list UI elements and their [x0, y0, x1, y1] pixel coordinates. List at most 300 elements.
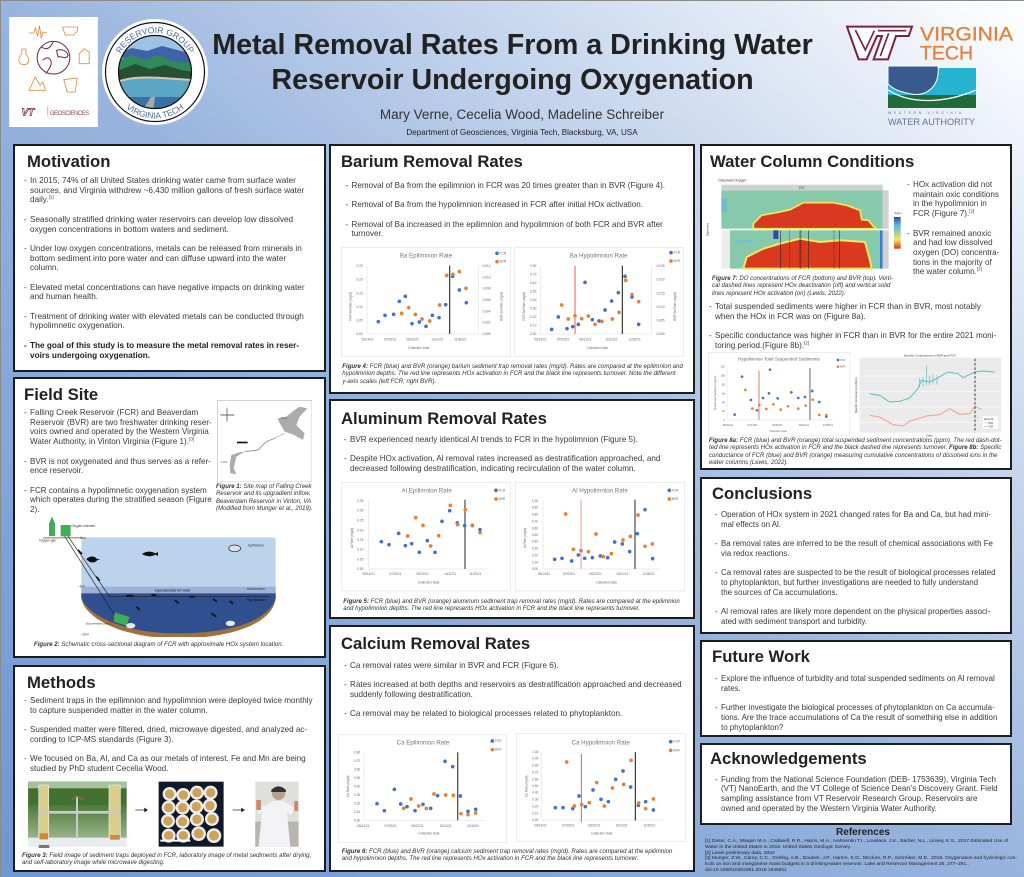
text: water column side bullets: oxygen (DO) concentra- [913, 248, 999, 257]
chart: Ba hypolimnion rate: FCR Ba Rate (mg/d) [522, 292, 526, 321]
chart: Ca hypolimnion rate: 0.00 [532, 818, 539, 822]
references [705, 827, 1017, 873]
chart: figure 8b specific conductance: BVR [989, 423, 994, 425]
caption: figure 8: Figure 8a: FCR (blue) and BVR (orange) total suspended sediment concentrations (ppm). The red dash-dot- [709, 437, 1002, 444]
chart: Ba epilimnion rate: 0.05 [356, 319, 363, 323]
heading: methods: Methods [27, 673, 96, 692]
chart: Ba hypolimnion rate [514, 247, 684, 357]
text: barium bullets: Removal of Ba from the hypolimnion increased in FCR after initial HOx activation. [352, 200, 643, 209]
text: future work bullets: to phytoplankton? [721, 722, 783, 732]
heading: barium: Barium Removal Rates [341, 152, 523, 171]
chart: Ba epilimnion rate: Collection Date [408, 346, 429, 350]
figure 2: HOx schematic: 0 m [81, 536, 86, 540]
text: motivation bullets: hypolimnetic oxygenation. [30, 321, 125, 330]
chart: Ca epilimnion rate: 0.70 [354, 759, 361, 763]
panel: field site [13, 377, 326, 658]
text: aluminum bullets: decreased following destratification, indicating recirculation of the water column. [350, 464, 636, 473]
chart: Ba hypolimnion rate: 0.00 [530, 332, 537, 336]
references list: trols on iron and manganese mass budgets in a drinking-water reservoir. Lake and Reservoir Management 35, 277–291.. [705, 862, 969, 867]
panel: aluminum removal rates [329, 399, 695, 619]
text: water column side bullets: the water column.[2] [913, 267, 982, 276]
references heading: References [836, 827, 890, 838]
text: aluminum bullets: Despite HOx activation, Al removal rates increased as destratification approached, and [350, 454, 660, 463]
figure 2: HOx schematic: Hypolimnion [247, 598, 266, 602]
text: field site bullets [24, 408, 212, 514]
chart: Ca epilimnion rate: 0.60 [354, 768, 361, 772]
text: future work bullets [715, 674, 997, 732]
text: conclusions bullets: - [715, 539, 718, 548]
text: field site bullets: FCR contains a hypolimnetic oxygenation system [30, 486, 207, 495]
text: motivation bullets: column. [30, 263, 59, 272]
text: aluminum bullets: - [344, 435, 347, 444]
chart: Ba epilimnion rate: 11/30/21 [454, 338, 466, 342]
chart: Ba hypolimnion rate: FCR [674, 251, 681, 255]
chart: Ba epilimnion rate: Ba Epilimnion Rate [400, 253, 452, 260]
logo: reservoir group: VIRGINIA TECH [128, 104, 184, 119]
chart: Al epilimnion rate: 0.15 [357, 538, 363, 542]
chart: Al hypolimnion rate: 07/03/21 [563, 572, 576, 576]
chart: Ba hypolimnion rate: 07/03/21 [557, 338, 570, 342]
chart: Ba epilimnion rate: 0.012 [482, 264, 490, 268]
text: conclusions bullets: ated with sediment transport and turbidity. [721, 617, 867, 626]
chart: Ca hypolimnion rate: 0.70 [532, 771, 539, 775]
text: methods bullets: studied by PhD student Cecelia Wood. [30, 764, 168, 773]
chart: Al epilimnion rate: 07/03/21 [389, 572, 401, 576]
text: conclusions bullets [715, 510, 996, 626]
text: barium bullets: - [346, 181, 348, 190]
chart: Ba epilimnion rate: 0.006 [482, 298, 490, 302]
figure 7: dissolved oxygen heatmap: Depth (m) [706, 223, 710, 236]
chart: Ba epilimnion rate: FCR Ba Rate (mg/d) [348, 292, 352, 321]
caption: figure 2: Figure 2: Schematic cross-sectional diagram of FCR with approximate HOx system location. [34, 641, 283, 648]
logo: reservoir group [102, 19, 208, 125]
text: future work bullets: - [715, 674, 718, 683]
text: motivation bullets: - [24, 215, 27, 224]
chart: Ca hypolimnion rate: 0.90 [532, 757, 539, 761]
chart: Ba hypolimnion rate: 0.020 [657, 278, 665, 282]
logo: western virginia water authority: WESTERN VIRGINIA [888, 111, 964, 115]
chart: figure 8a total suspended sediments: 120 [721, 365, 726, 369]
heading: field site: Field Site [24, 385, 98, 404]
heading: calcium: Calcium Removal Rates [341, 634, 530, 653]
text: conclusions bullets: to phytoplankton, but further investigations are needed to fully understand [721, 578, 978, 587]
chart: Ca hypolimnion rate: 10/11/21 [616, 824, 628, 828]
chart: figure 8a total suspended sediments: 05/24/21 [723, 423, 734, 427]
chart: Al epilimnion rate: 0.30 [357, 509, 363, 513]
chart: Ba hypolimnion rate: BVR [674, 259, 681, 263]
caption: figure 7: cal dashed lines represent HOx deactivation (off) and vertical solid [712, 282, 890, 289]
chart: Ca hypolimnion rate: 0.40 [532, 791, 539, 795]
text: barium bullets: Removal of Ba from the epilimnion in FCR was 20 times greater than in BVR (Figure 4). [352, 181, 665, 190]
text: conclusions bullets: via redox reactions. [721, 549, 789, 558]
text: motivation bullets: voirs undergoing oxygenation. [30, 351, 150, 360]
chart: Ba epilimnion rate: FCR [499, 252, 507, 256]
figure 1: site map: FCR [221, 460, 228, 464]
text: acknowledgements bullet: sampling assistance from VT Reservoir Research Group. Reservoirs are [721, 794, 977, 803]
text: motivation bullets: Treatment of drinking water with elevated metals can be conducted through [30, 312, 304, 321]
text: methods bullets: - [24, 725, 27, 734]
text: field site bullets: - [24, 456, 27, 466]
caption: figure 5: Figure 5: FCR (blue) and BVR (orange) aluminum sediment trap removal rates (mg/d). Rates are compared at the epilimnion [343, 598, 680, 605]
chart: Ba hypolimnion rate: 0.60 [530, 281, 537, 285]
text: calcium bullets: - [344, 661, 347, 670]
text: water column lower bullets: - [709, 331, 712, 340]
title [212, 29, 813, 96]
text: water column lower bullets [709, 302, 996, 350]
figure 2: HOx schematic: Epilimnion [249, 543, 264, 547]
logo: reservoir group: RESERVOIR GROUP [116, 27, 194, 54]
chart: figure 8a total suspended sediments: BVR [840, 365, 846, 369]
chart: Ca hypolimnion rate: 0.60 [532, 778, 539, 782]
figure 3: photo sequence [28, 782, 299, 848]
chart: Ca epilimnion rate: 0.80 [354, 751, 361, 755]
chart: figure 8b specific conductance [854, 353, 1002, 437]
text: conclusions bullets: - [715, 568, 718, 577]
chart: Al epilimnion rate [341, 482, 511, 592]
text: motivation bullets: bottom sediment into pore water and can diffuse upward into the water [30, 254, 286, 263]
text: water column side bullets: BVR remained anoxic [913, 228, 991, 238]
chart: Ca epilimnion rate: 0.10 [354, 810, 361, 814]
text: conclusions bullets: Ba removal rates are inferred to be the result of chemical associations with Fe [721, 539, 993, 548]
text: conclusions bullets: Ca removal rates are suspected to be the result of biological processes related [721, 568, 996, 577]
text: water column side bullets: FCR (Figure 7).[2] [913, 208, 974, 218]
figure 2: HOx schematic: ~10 m [81, 633, 90, 637]
chart: Al hypolimnion rate: 0.20 [532, 554, 539, 558]
text: acknowledgements bullet: (VT) NanoEarth, and the VT College of Science Dean's Discovery Grant. Field [721, 784, 998, 793]
text: aluminum bullets: - [344, 454, 347, 463]
figure 7: dissolved oxygen heatmap: 2021 [799, 185, 805, 189]
chart: Al hypolimnion rate: 0.80 [532, 513, 539, 517]
chart: Ba epilimnion rate: BVR [499, 260, 507, 264]
chart: Ba hypolimnion rate: 0.015 [657, 292, 665, 296]
chart: Ba epilimnion rate: 0.004 [482, 310, 490, 314]
text: methods bullets: to capture suspended matter in the water column. [30, 706, 208, 715]
heading: acknowledgements: Acknowledgements [710, 749, 867, 768]
text: field site bullets: 2). [30, 505, 39, 514]
chart: Ba epilimnion rate: 0.002 [482, 321, 490, 325]
figure 7: dissolved oxygen heatmap [706, 178, 902, 270]
text: barium bullets: turnover. [352, 229, 383, 238]
chart: Ca hypolimnion rate: Collection Date [591, 832, 613, 836]
text: conclusions bullets: mal effects on Al. [721, 520, 781, 529]
caption: figure 1: Reservoir and its upgradient inflow, [216, 490, 311, 497]
chart: Ca epilimnion rate: Ca Epilimnion Rate [397, 740, 450, 747]
chart: Ba hypolimnion rate: 05/14/21 [534, 338, 547, 342]
chart: Ca epilimnion rate: 0.40 [354, 785, 361, 789]
chart: figure 8a total suspended sediments: 80 [722, 383, 726, 387]
text: motivation bullets: The goal of this study is to measure the metal removal rates in reser- [30, 341, 299, 350]
text: motivation bullets: In 2015, 74% of all United States drinking water came from surface water [30, 176, 296, 185]
caption: figure 4: hypolimnion depths. The red line represents HOx activation in FCR and the black line represents turnover. Note the different [342, 370, 676, 377]
chart: Al hypolimnion rate: 11/30/21 [643, 572, 655, 576]
chart: Ba hypolimnion rate: 0.10 [530, 324, 537, 328]
references list: [3] Munger, Z.W., Carey, C.C., Gerling, A.B., Doubek, J.P., Hamre, K.D., Mcclure, R.P., Schreiber, M.E., 2019. Oxygenation and hydrologic con- [705, 856, 1017, 861]
panel: future work [700, 640, 1012, 737]
figure 7: dissolved oxygen heatmap: (mg/L) [894, 211, 902, 215]
figure 2: HOx schematic: Submersible pump [86, 621, 111, 625]
text: motivation bullets: sources, and Virginia withdrew ~6,430 million gallons of fresh surface water [30, 186, 304, 195]
chart: Al hypolimnion rate: BVR [672, 497, 679, 501]
chart: figure 8a total suspended sediments: 40 [722, 401, 726, 405]
chart: Ba hypolimnion rate: 0.010 [657, 305, 665, 309]
chart: figure 8a total suspended sediments: Suspended Sediments (ppm) [713, 376, 717, 410]
caption: figure 8 [709, 437, 1002, 466]
title: Reservoir Undergoing Oxygenation [271, 64, 754, 96]
chart: Ba epilimnion rate: 0.20 [356, 278, 363, 282]
text: water column lower bullets: toring period.(Figure 8b).[2] [715, 340, 809, 350]
chart: Ba epilimnion rate: 08/22/21 [406, 338, 419, 342]
chart: Ca hypolimnion rate: 0.50 [532, 784, 539, 788]
caption: figure 3 [22, 852, 311, 866]
text: methods bullets: We focused on Ba, Al, and Ca as our metals of interest. Fe and Mn are being [30, 754, 306, 763]
chart: Ca hypolimnion rate: Ca Hypolimnion Rate [572, 740, 630, 747]
text: motivation bullets: - [24, 176, 27, 185]
chart: Ca hypolimnion rate: 11/30/21 [643, 824, 656, 828]
logo: virginia tech: VIRGINIA [920, 24, 1013, 46]
caption: figure 8: conductance of FCR (blue) and BVR (orange) measuring cumulative concentrations of dissolved ions in the [709, 452, 998, 459]
chart: figure 8a total suspended sediments: 09/01/21 [772, 423, 783, 427]
text: field site bullets: which operates during the stratified season (Figure [30, 495, 212, 504]
chart: Ca hypolimnion rate: 0.30 [532, 798, 539, 802]
figure 7: dissolved oxygen heatmap: Dissolved Oxygen [718, 178, 747, 182]
text: motivation bullets: oxygen concentrations in bottom waters and sediment. [30, 224, 229, 234]
text: acknowledgements bullet: owned and operated by the Western Virginia Water Authority. [721, 804, 937, 813]
text: field site bullets: - [24, 408, 27, 417]
panel: methods [13, 665, 326, 872]
panel: calcium removal rates [329, 625, 695, 872]
chart: Ca epilimnion rate: 0.50 [354, 776, 361, 780]
text: motivation bullets: - [24, 283, 27, 292]
panel: conclusions [700, 477, 1012, 634]
text: water column lower bullets: Total suspended sediments were higher in FCR than in BVR, most notably [715, 302, 981, 311]
caption: figure 3: and self-laboratory image while microwave digesting. [22, 859, 165, 866]
chart: Al epilimnion rate: 08/22/21 [416, 572, 429, 576]
caption: figure 8: ted line represents HOx activation in FCR and the black dashed line represents turnover. Figure 8b: Specific [709, 444, 1001, 451]
chart: Ca epilimnion rate: 0.20 [354, 802, 361, 806]
logo: college of geosciences: VT [22, 108, 35, 119]
references list: [1] Dieter, C.A., Maupin M.A., Caldwell, R.R., Harris, M.A., Ivahnenko T.I., Lovelace, J.K., Barber, N.L., Linsey, K.S., 2017.Estimated Use of [705, 839, 1008, 844]
chart: Ba epilimnion rate: 10/11/21 [431, 338, 443, 342]
text: water column side bullets: - [907, 228, 910, 238]
text: conclusions bullets: the sources of Ca accumulations. [721, 588, 838, 597]
text: calcium bullets: Ca removal rates were similar in BVR and FCR (Figure 6). [350, 661, 559, 670]
chart: figure 8b specific conductance: Specific Conductance (uS/cm) [854, 377, 858, 413]
text: future work bullets: rates. [721, 684, 741, 693]
caption: figure 1: Beaverdam Reservoir in Vinton, VA [216, 498, 311, 505]
chart: Al hypolimnion rate [515, 482, 685, 592]
chart: Ba hypolimnion rate: 0.80 [530, 264, 537, 268]
chart: Al hypolimnion rate: Al Hypolimnion Rate [572, 488, 629, 495]
chart: Al epilimnion rate: Al Rate (mg/d) [350, 528, 354, 548]
chart: Al epilimnion rate: 0.25 [357, 519, 363, 523]
chart: Ca epilimnion rate [338, 734, 507, 843]
chart: Ba epilimnion rate: 0.25 [356, 264, 363, 268]
text: field site bullets: Falling Creek Reservoir (FCR) and Beaverdam [30, 408, 198, 417]
text: motivation bullets: daily.[1] [30, 195, 54, 204]
chart: figure 8b specific conductance: Specific Conductance in BVR and FCR [904, 353, 957, 357]
chart: Ba hypolimnion rate: 0.025 [657, 264, 665, 268]
chart: Ba epilimnion rate: 0.010 [482, 276, 490, 280]
chart: Ca hypolimnion rate: 1.00 [532, 750, 539, 754]
logo: college of geosciences [9, 17, 98, 127]
text: future work bullets: - [715, 703, 718, 712]
text: conclusions bullets: - [715, 607, 718, 616]
chart: Ba hypolimnion rate: 11/30/21 [629, 338, 641, 342]
caption: figure 7: Figure 7: DO concentrations of FCR (bottom) and BVR (top). Verti- [712, 275, 893, 282]
text: future work bullets: Further investigate the biological processes of phytoplankton on Ca accumula- [721, 703, 995, 712]
text: methods bullets: - [24, 754, 27, 763]
text: acknowledgements bullet: Funding from the National Science Foundation (DEB- 1753639), Virginia Tech [721, 774, 996, 784]
references list [705, 838, 1017, 873]
references list: [2] Lewis preliminary data, 2022 [705, 851, 775, 856]
chart: Ca hypolimnion rate: 0.20 [532, 805, 539, 809]
affiliation: Department of Geosciences, Virginia Tech, Blacksburg, VA, USA [406, 128, 638, 137]
caption: figure 1: (Modified from Munger et al., 2019). [216, 505, 313, 512]
figure 2: HOx schematic: Oxygen gas [39, 539, 57, 543]
text: methods bullets: Suspended matter were filtered, dried, microwave digested, and analyzed ac- [30, 725, 307, 734]
chart: Al hypolimnion rate: Collection Date [596, 581, 618, 585]
text: conclusions bullets: - [715, 510, 718, 519]
text: water column side bullets: maintain oxic conditions [913, 190, 999, 199]
chart: Ca epilimnion rate: Collection Date [419, 832, 440, 836]
text: motivation bullets: - [24, 312, 27, 321]
chart: Al epilimnion rate: 05/14/21 [362, 572, 375, 576]
chart: Al epilimnion rate: Collection Date [418, 581, 439, 585]
caption: figure 5: and hypolimnion depths. The red line represents HOx activation in FCR and the black line represents turnover. [343, 605, 640, 612]
chart: figure 8a total suspended sediments: 10/21/21 [799, 423, 810, 427]
chart: figure 8b specific conductance: Reservoir [984, 418, 994, 421]
chart: Ca hypolimnion rate: 05/14/21 [535, 824, 547, 828]
chart: Ba hypolimnion rate: 10/11/21 [606, 338, 618, 342]
text: acknowledgements bullet [715, 774, 998, 813]
text: calcium bullets: suddenly following destratification. [350, 690, 473, 699]
chart: Ca epilimnion rate: 05/14/21 [357, 824, 370, 828]
text: motivation bullets: Seasonally stratified drinking water reservoirs can develop low dissolved [30, 215, 293, 224]
chart: Al epilimnion rate: BVR [498, 497, 506, 501]
text: conclusions bullets: Operation of HOx system in 2021 changed rates for Ba and Ca, but had mini- [721, 510, 991, 519]
chart: Ba hypolimnion rate: Collection Date [587, 346, 609, 350]
chart: Al hypolimnion rate: 0.50 [532, 533, 539, 537]
caption: figure 1: Figure 1: Site map of Falling Creek [216, 483, 312, 490]
text: future work bullets: tions. Are the trace accumulations of Ca the result of something else in addition [721, 713, 997, 722]
caption: figure 5 [343, 598, 680, 612]
text: aluminum bullets [344, 435, 660, 473]
text: calcium bullets: Ca removal may be related to biological processes related to phytoplankton. [350, 709, 622, 718]
panel: motivation [13, 144, 326, 372]
references list: doi:10.1080/10402381.2018.1545811 [705, 868, 787, 873]
chart: Ba epilimnion rate: BVR Ba Rate (mg/d) [499, 292, 503, 321]
references list: Water in the United States in 2015. United States Geologic Survey. [705, 845, 851, 850]
chart: Ca epilimnion rate: 08/22/21 [411, 824, 424, 828]
figure 2: HOx schematic: ~6 m [78, 585, 86, 589]
chart: Ba hypolimnion rate: Ba Hypolimnion Rate [570, 253, 628, 260]
chart: Al hypolimnion rate: 05/14/21 [538, 572, 551, 576]
chart: Al hypolimnion rate: 0.00 [532, 567, 539, 571]
chart: Ba hypolimnion rate: 0.005 [657, 319, 665, 323]
chart: figure 8a total suspended sediments: 0 [724, 418, 726, 422]
heading: water column conditions: Water Column Conditions [710, 152, 914, 171]
chart: Al hypolimnion rate: 1.00 [532, 499, 539, 503]
text: field site bullets: ence reservoir. [30, 466, 83, 475]
chart: Ca epilimnion rate: 10/11/21 [440, 824, 452, 828]
chart: figure 8a total suspended sediments: 07/13/21 [747, 423, 758, 427]
text: field site bullets: BVR is not oxygenated and thus serves as a refer- [30, 456, 211, 466]
chart: Ba epilimnion rate [341, 247, 511, 357]
text: motivation bullets: Under low oxygen concentrations, metals can be released from minerals in [30, 244, 302, 253]
caption: figure 3: Figure 3: Field image of sediment traps deployed in FCR, laboratory image of metal sediments after drying, [22, 852, 311, 859]
chart: figure 8a total suspended sediments: Hypolimnion Total Suspended Sediments [738, 357, 821, 362]
text: barium bullets [346, 181, 665, 238]
chart: Al epilimnion rate: Al Epilimnion Rate [401, 488, 452, 495]
figure 2: HOx schematic: Metalimnion [247, 587, 265, 591]
panel: barium removal rates [329, 144, 695, 394]
text: calcium bullets: Rates increased at both depths and reservoirs as destratification approached and decreased [350, 680, 682, 689]
chart: Ba hypolimnion rate: 0.30 [530, 307, 537, 311]
chart: Al epilimnion rate: 11/30/21 [469, 572, 481, 576]
logo: college of geosciences: GEOSCIENCES [50, 111, 89, 117]
authors: Mary Verne, Cecelia Wood, Madeline Schreiber [380, 107, 664, 122]
panel: water column conditions [700, 144, 1012, 470]
chart: Al epilimnion rate: 0.35 [357, 499, 363, 503]
chart: Al hypolimnion rate: Al Rate (mg/d) [523, 528, 527, 548]
chart: Ba epilimnion rate: 0.15 [356, 292, 363, 296]
chart: Al hypolimnion rate: 08/22/21 [590, 572, 602, 576]
chart: Ba epilimnion rate: 0.000 [482, 332, 490, 336]
text: future work bullets: Explore the influence of turbidity and total suspended sediments on Al removal [721, 674, 995, 683]
figure 2: HOx schematic: Supersaturated DO water [155, 589, 191, 593]
caption: figure 4 [342, 363, 683, 385]
chart: figure 8a total suspended sediments: 60 [722, 392, 726, 396]
chart: Ca epilimnion rate: 0.00 [354, 819, 361, 823]
chart: Al hypolimnion rate: 0.60 [532, 527, 539, 531]
text: water column lower bullets: - [709, 302, 712, 311]
figure 1: site map [217, 400, 312, 482]
chart: Ca epilimnion rate: 0.30 [354, 793, 361, 797]
chart: Ba hypolimnion rate: 0.40 [530, 298, 537, 302]
logo: western virginia water authority [888, 66, 976, 127]
chart: Ca epilimnion rate: BVR [495, 748, 503, 752]
text: methods bullets [24, 696, 313, 773]
text: water column lower bullets: when the HOx in FCR was on (Figure 8a). [715, 312, 866, 321]
text: water column side bullets: tions in the majority of [913, 258, 992, 267]
chart: Ba epilimnion rate: 07/03/21 [384, 338, 396, 342]
chart: Ca hypolimnion rate: BVR [673, 749, 681, 753]
figure 1: site map: BVR [281, 416, 288, 420]
chart: Al epilimnion rate: 0.10 [357, 548, 363, 552]
chart: Ba epilimnion rate: 0.008 [482, 287, 490, 291]
chart: figure 8a total suspended sediments: Collection Date [769, 429, 788, 433]
text: barium bullets: Removal of Ba increased in the epilimnion and hypolimnion of both FCR and BVR after [352, 220, 663, 229]
caption: figure 6: Figure 6: FCR (blue) and BVR (orange) calcium sediment trap removal rates (mg/d). Rates are compared at the epilimnion [342, 848, 672, 855]
chart: Ca epilimnion rate: 07/03/21 [385, 824, 397, 828]
heading: future work: Future Work [712, 647, 810, 666]
text: conclusions bullets: Al removal rates are likely more dependent on the physical properties associ- [721, 607, 990, 616]
chart: Ba epilimnion rate: 05/14/21 [361, 338, 374, 342]
chart: Al hypolimnion rate: 0.90 [532, 506, 539, 510]
chart: Ba epilimnion rate: 0.00 [356, 332, 363, 336]
chart: Al epilimnion rate: FCR [498, 489, 506, 493]
text: motivation bullets: - [24, 244, 27, 253]
logo: western virginia water authority: WATER AUTHORITY [888, 117, 975, 127]
chart: Al hypolimnion rate: 0.30 [532, 547, 539, 551]
text: methods bullets: - [24, 696, 27, 705]
caption: figure 6: and hypolimnion depths. The red line represents HOx activation in FCR and the black line represents turnover. [342, 855, 638, 862]
chart: Al epilimnion rate: 0.05 [357, 558, 363, 562]
caption: figure 1 [216, 483, 313, 512]
caption: figure 7 [712, 275, 893, 297]
chart: figure 8a total suspended sediments [708, 352, 850, 436]
text: barium bullets: - [346, 200, 348, 209]
